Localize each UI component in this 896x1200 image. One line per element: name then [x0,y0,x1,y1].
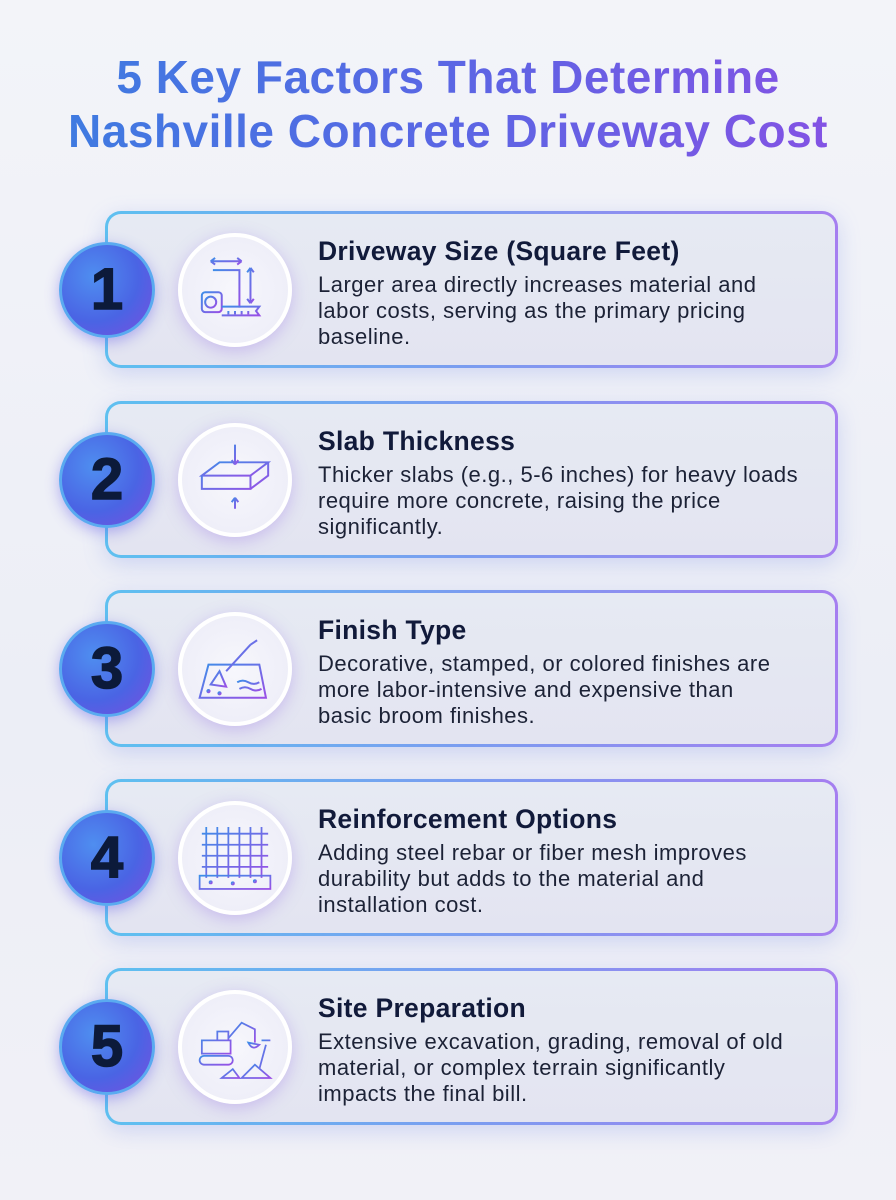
number badge 3 [59,621,155,717]
text: Extensive excavation, grading, removal of old [318,1029,783,1054]
text: Adding steel rebar or fiber mesh improves [318,840,747,865]
heading: Finish Type [318,615,467,645]
number badge 4 [59,810,155,906]
text: material, or complex terrain significantly [318,1055,725,1080]
text: significantly. [318,514,443,539]
title [0,50,896,158]
panel: slab thickness [105,401,838,558]
text: installation cost. [318,892,484,917]
panel: site preparation [105,968,838,1125]
panel: finish type [105,590,838,747]
icon: trowel [178,612,292,726]
text: more labor-intensive and expensive than [318,677,734,702]
icon: slab [178,423,292,537]
text [318,651,770,728]
text: require more concrete, raising the price [318,488,721,513]
heading: Site Preparation [318,993,526,1023]
text [318,462,798,539]
panel: driveway size [105,211,838,368]
heading: Driveway Size (Square Feet) [318,236,680,266]
number badge 5: 5 [91,1014,123,1079]
text: labor costs, serving as the primary pricing [318,298,745,323]
text [318,840,747,917]
text: basic broom finishes. [318,703,535,728]
text: durability but adds to the material and [318,866,704,891]
number badge 2 [59,432,155,528]
title: Nashville Concrete Driveway Cost [68,105,828,157]
text: Decorative, stamped, or colored finishes are [318,651,770,676]
title: 5 Key Factors That Determine [116,51,780,103]
icon: rebar mesh [178,801,292,915]
number badge 5 [59,999,155,1095]
text: impacts the final bill. [318,1081,528,1106]
text [318,1029,783,1106]
text: baseline. [318,324,411,349]
number badge 2: 2 [91,447,123,512]
text [318,272,756,349]
number badge 4: 4 [91,825,123,890]
icon: excavator [178,990,292,1104]
number badge 1: 1 [91,257,123,322]
panel: reinforcement [105,779,838,936]
number badge 1 [59,242,155,338]
text: Larger area directly increases material and [318,272,756,297]
number badge 3: 3 [91,636,123,701]
heading: Slab Thickness [318,426,515,456]
text: Thicker slabs (e.g., 5-6 inches) for heavy loads [318,462,798,487]
icon: tape measure [178,233,292,347]
heading: Reinforcement Options [318,804,617,834]
